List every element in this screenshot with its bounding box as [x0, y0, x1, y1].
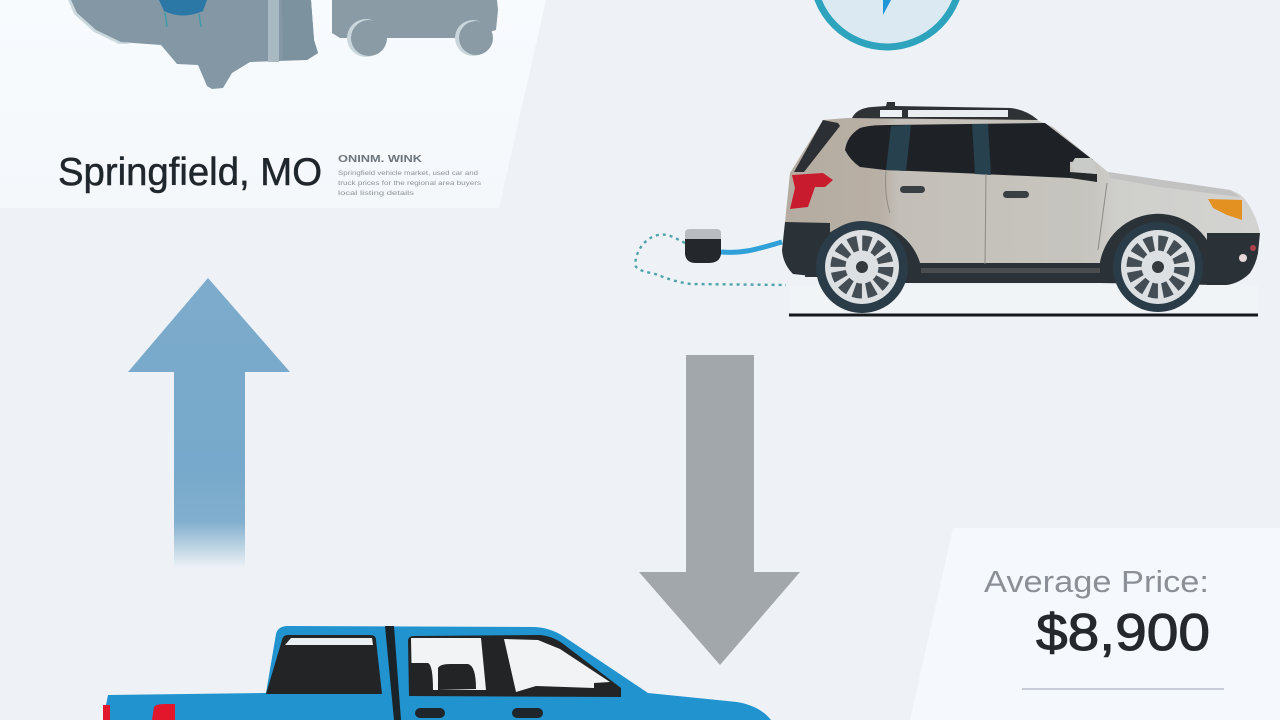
text block: location note: ONINM. WINK [338, 153, 423, 165]
icon: compass gauge [813, 0, 961, 47]
door lines and handles [886, 170, 1107, 264]
lower cladding [782, 214, 1260, 285]
value: $8,900: $8,900 [1036, 604, 1210, 662]
arrow: up [128, 278, 290, 568]
price underline [1022, 688, 1224, 690]
fog light [1239, 245, 1256, 262]
cab door divider [385, 626, 401, 720]
SUV body [785, 118, 1260, 264]
rear wheel [816, 221, 908, 313]
heading: Springfield, MO: Springfield, MO [58, 151, 322, 194]
text block: location note [338, 153, 482, 197]
icon: charging cable and plug [635, 229, 786, 285]
road surface under car [790, 285, 1258, 313]
panel: location [0, 0, 546, 208]
text block: location note: truck prices for the regional area buyers [338, 180, 482, 187]
roof rack [840, 102, 1038, 120]
headlight [1208, 199, 1242, 220]
hood shading [1108, 172, 1240, 197]
rear window [266, 635, 382, 694]
side mirror [1070, 158, 1097, 182]
side windows [845, 123, 1093, 178]
front windows [408, 635, 621, 697]
label: Average Price: Average Price: [984, 564, 1209, 599]
ground line [789, 314, 1258, 316]
truck body [103, 626, 771, 720]
rear window strip [794, 120, 840, 172]
illustration: blue pickup truck [103, 626, 771, 720]
panel: average price [910, 528, 1280, 720]
text block: location note: local listing details [338, 190, 415, 197]
arrow: down [639, 355, 800, 665]
tail lights [103, 704, 175, 720]
text block: location note: Springfield vehicle market, used car and [338, 170, 478, 177]
door handles [415, 708, 543, 718]
tail light [790, 173, 833, 209]
front wheel [1113, 222, 1203, 312]
illustration: grey SUV with charger [635, 102, 1260, 316]
icon: van silhouette [332, 0, 498, 57]
icon: map of the USA [68, 0, 318, 89]
